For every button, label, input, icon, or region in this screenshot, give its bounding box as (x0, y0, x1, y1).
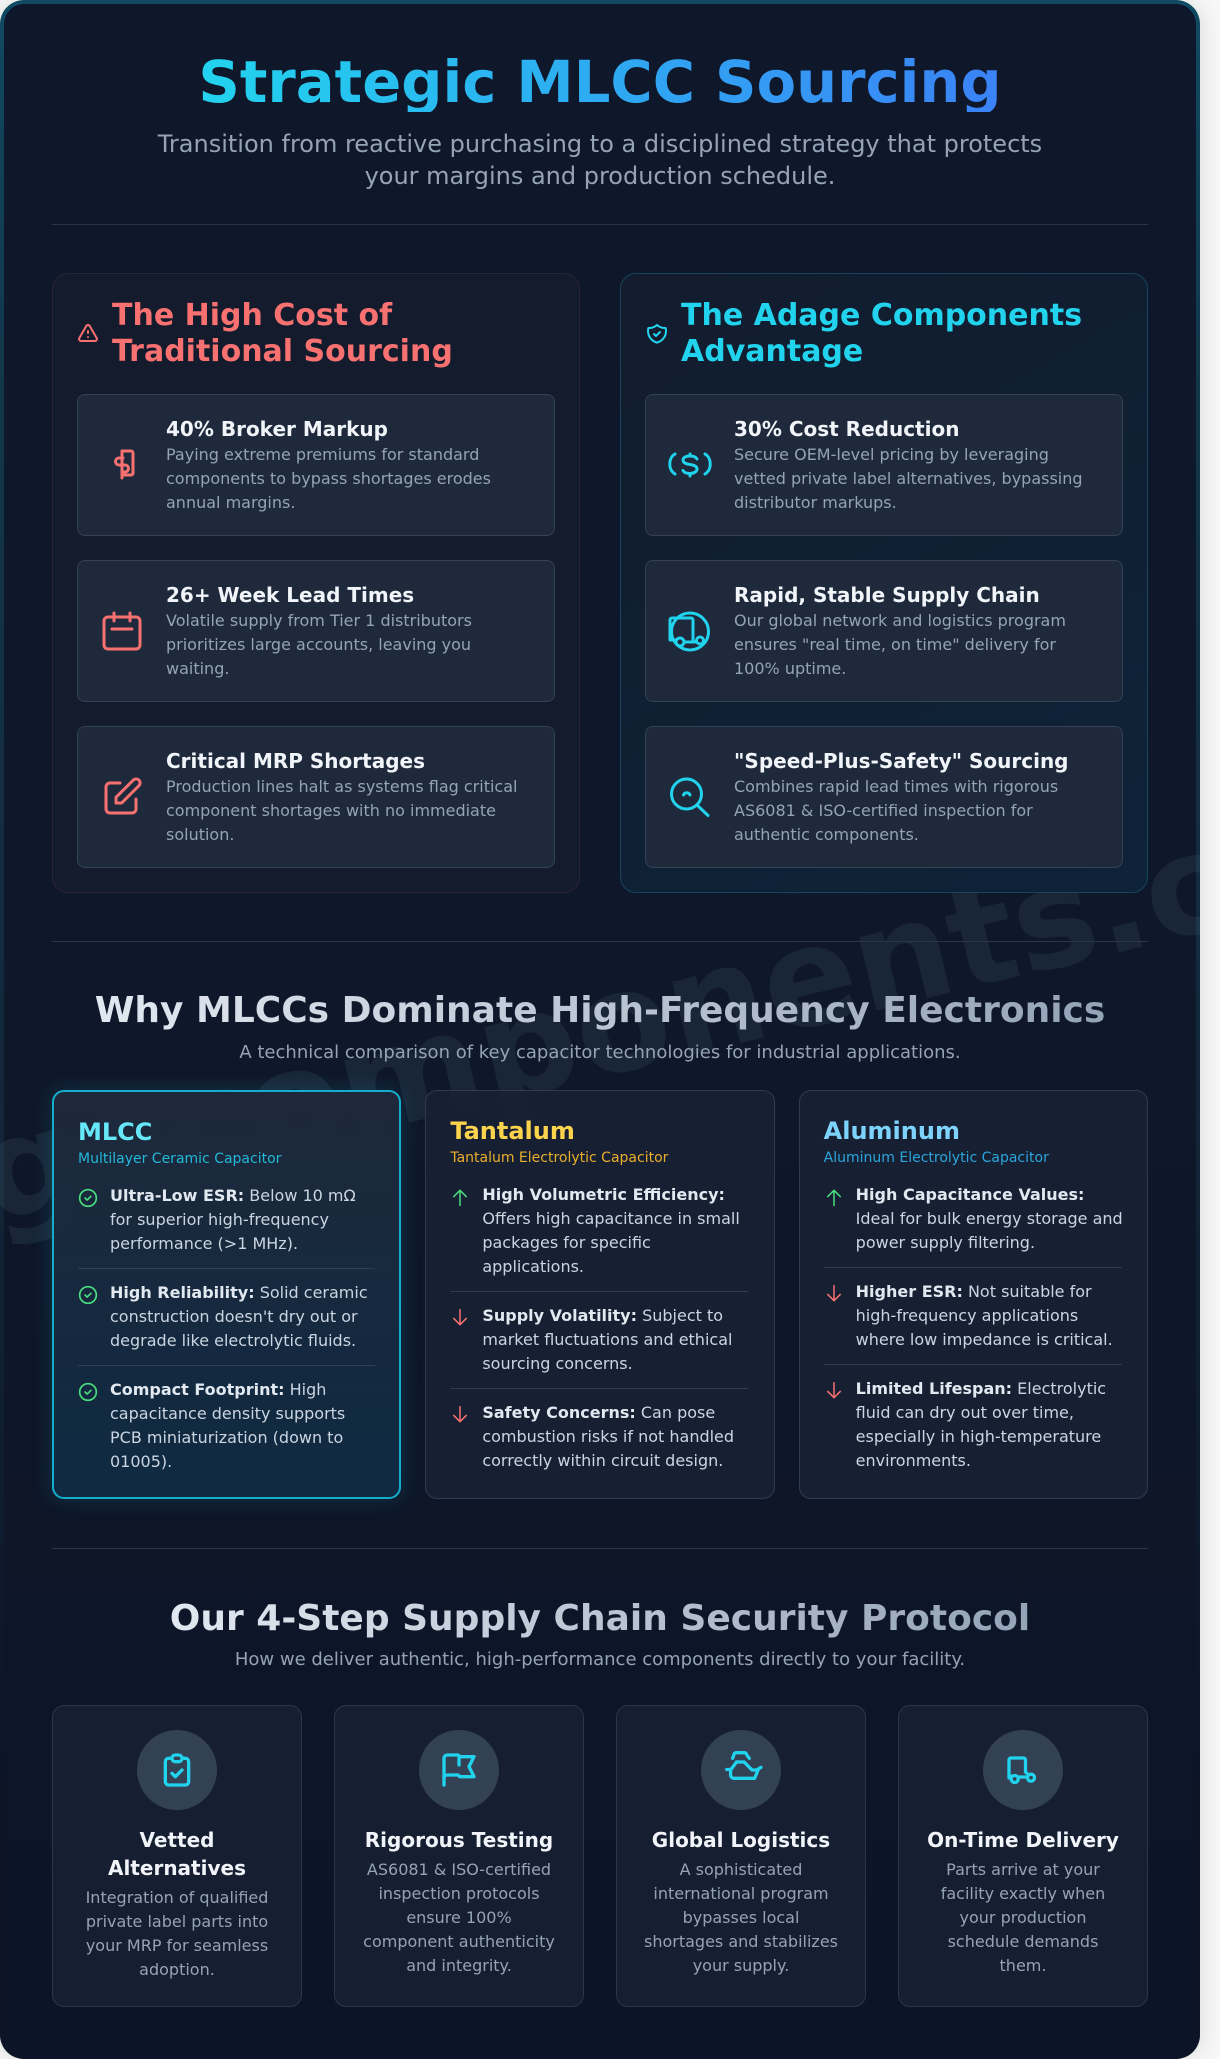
panel: tantalum: Offers high capacitance in small (482, 1209, 740, 1228)
step 2: rigorous testing (334, 1705, 584, 2007)
item: speed plus safety: Combines rapid lead times with rigorous (734, 777, 1058, 796)
item: cost reduction: 30% Cost Reduction (734, 417, 959, 441)
point: safety concerns (453, 1403, 734, 1470)
panel: tantalum: Safety Concerns: Can pose (482, 1403, 715, 1422)
panel: tantalum: High Volumetric Efficiency: (482, 1185, 725, 1204)
panel: MLCC: Compact Footprint: High (110, 1380, 326, 1399)
step 1: vetted alternatives: private label parts into (86, 1912, 268, 1931)
step 1: vetted alternatives: your MRP for seamless (86, 1936, 268, 1955)
item: MRP shortages: Production lines halt as systems flag critical (166, 777, 517, 796)
item: lead times (77, 560, 555, 702)
panel: aluminum: high-frequency applications (856, 1306, 1078, 1325)
item: supply chain (645, 560, 1123, 702)
item: MRP shortages (77, 726, 555, 868)
item: speed plus safety: authentic components. (734, 825, 919, 844)
step 1: vetted alternatives: Vetted (140, 1828, 214, 1852)
step 3: global logistics: international program (653, 1884, 829, 1903)
step 1: vetted alternatives: Integration of qualified (86, 1888, 268, 1907)
panel: adage components advantage (620, 273, 1148, 893)
step 1: vetted alternatives (52, 1705, 302, 2007)
item: broker markup: annual margins. (166, 493, 295, 512)
subtitle (158, 130, 1042, 190)
item: broker markup: components to bypass shortages erodes (166, 469, 491, 488)
heading: traditional sourcing: Traditional Sourcing (112, 334, 453, 369)
item: supply chain: Rapid, Stable Supply Chain (734, 583, 1040, 607)
step 3: global logistics: shortages and stabilizes (644, 1932, 838, 1951)
item: MRP shortages: Critical MRP Shortages (166, 749, 425, 773)
step 4: on-time delivery (898, 1705, 1148, 2007)
icon: ship (701, 1730, 781, 1810)
heading: traditional sourcing: The High Cost of (112, 298, 392, 333)
panel: aluminum: High Capacitance Values: (856, 1185, 1084, 1204)
panel: MLCC: Ultra-Low ESR: Below 10 mΩ (110, 1186, 356, 1205)
point: compact footprint (78, 1380, 345, 1471)
tantalum title: Tantalum (450, 1117, 575, 1145)
title: Strategic MLCC Sourcing (198, 49, 1002, 116)
panel: aluminum: power supply filtering. (856, 1233, 1035, 1252)
item: supply chain: Our global network and logistics program (734, 611, 1066, 630)
MLCC subtitle: Multilayer Ceramic Capacitor (78, 1151, 281, 1167)
step 2: rigorous testing: Rigorous Testing (365, 1828, 553, 1852)
step 4: on-time delivery: your production (960, 1908, 1086, 1927)
heading: adage advantage: The Adage Components (681, 298, 1082, 333)
icon: clipboard check (137, 1730, 217, 1810)
item: cost reduction (645, 394, 1123, 536)
point: limited lifespan (827, 1379, 1106, 1470)
panel: MLCC (52, 1090, 401, 1499)
item: broker markup (77, 394, 555, 536)
step 4: on-time delivery: them. (1000, 1956, 1046, 1975)
item: cost reduction: Secure OEM-level pricing by leveraging (734, 445, 1049, 464)
panel: tantalum: applications. (482, 1257, 584, 1276)
panel: tantalum: sourcing concerns. (482, 1354, 633, 1373)
aluminum subtitle: Aluminum Electrolytic Capacitor (824, 1150, 1049, 1166)
step 3: global logistics (616, 1705, 866, 2007)
item: MRP shortages: component shortages with no immediate (166, 801, 496, 820)
item: speed plus safety: AS6081 & ISO-certified inspection for (734, 801, 1033, 820)
point: high reliability (78, 1283, 368, 1350)
item: cost reduction: vetted private label alternatives, bypassing (734, 469, 1083, 488)
step 2: rigorous testing: AS6081 & ISO-certified (367, 1860, 551, 1879)
item: cost reduction: distributor markups. (734, 493, 897, 512)
item: speed plus safety (645, 726, 1123, 868)
section subtitle: comparison: A technical comparison of key capacitor technologies for industrial applications. (239, 1042, 961, 1063)
panel: tantalum: correctly within circuit design. (482, 1451, 723, 1470)
panel: MLCC: capacitance density supports (110, 1404, 345, 1423)
step 2: rigorous testing: ensure 100% (406, 1908, 512, 1927)
item: MRP shortages: solution. (166, 825, 234, 844)
step 4: on-time delivery: facility exactly when (941, 1884, 1105, 1903)
point: higher ESR (827, 1282, 1113, 1349)
step 1: vetted alternatives: adoption. (139, 1960, 215, 1979)
item: broker markup: Paying extreme premiums for standard (166, 445, 479, 464)
point: high capacitance (827, 1185, 1123, 1252)
heading: adage advantage: Advantage (681, 334, 863, 369)
step 1: vetted alternatives: Alternatives (108, 1856, 246, 1880)
panel: aluminum: where low impedance is critical. (856, 1330, 1113, 1349)
panel: aluminum: Ideal for bulk energy storage and (856, 1209, 1123, 1228)
icon: flag (419, 1730, 499, 1810)
step 3: global logistics: your supply. (693, 1956, 789, 1975)
panel: MLCC: construction doesn't dry out or (110, 1307, 358, 1326)
section subtitle: protocol: How we deliver authentic, high-performance components directly to your facility. (235, 1649, 965, 1670)
item: lead times: 26+ Week Lead Times (166, 583, 414, 607)
panel: tantalum: combustion risks if not handled (482, 1427, 734, 1446)
MLCC title: MLCC (78, 1118, 152, 1146)
point: volumetric efficiency (453, 1185, 740, 1276)
panel: MLCC: degrade like electrolytic fluids. (110, 1331, 356, 1350)
item: supply chain: ensures "real time, on time" delivery for (734, 635, 1056, 654)
step 4: on-time delivery: Parts arrive at your (946, 1860, 1100, 1879)
panel: tantalum (425, 1090, 775, 1499)
item: supply chain: 100% uptime. (734, 659, 846, 678)
panel: MLCC: for superior high-frequency (110, 1210, 329, 1229)
item: lead times: Volatile supply from Tier 1 distributors (166, 611, 472, 630)
panel: aluminum: Limited Lifespan: Electrolytic (856, 1379, 1106, 1398)
item: lead times: prioritizes large accounts, leaving you (166, 635, 471, 654)
panel: tantalum: packages for specific (482, 1233, 651, 1252)
item: broker markup: 40% Broker Markup (166, 417, 388, 441)
step 2: rigorous testing: and integrity. (406, 1956, 512, 1975)
panel: aluminum (799, 1090, 1148, 1499)
panel: high cost of traditional sourcing (52, 273, 580, 893)
panel: tantalum: Supply Volatility: Subject to (482, 1306, 723, 1325)
item: lead times: waiting. (166, 659, 229, 678)
panel: MLCC: PCB miniaturization (down to (110, 1428, 343, 1447)
heading: why MLCCs dominate: Why MLCCs Dominate High-Frequency Electronics (95, 990, 1105, 1031)
point: supply volatility (453, 1306, 732, 1373)
step 2: rigorous testing: component authenticity (363, 1932, 555, 1951)
panel: aluminum: especially in high-temperature (856, 1427, 1101, 1446)
panel: MLCC: performance (>1 MHz). (110, 1234, 298, 1253)
panel: MLCC: 01005). (110, 1452, 172, 1471)
subtitle: your margins and production schedule. (365, 162, 835, 190)
panel: aluminum: environments. (856, 1451, 971, 1470)
panel: aluminum: fluid can dry out over time, (856, 1403, 1074, 1422)
step 2: rigorous testing: inspection protocols (378, 1884, 540, 1903)
panel: MLCC: High Reliability: Solid ceramic (110, 1283, 368, 1302)
heading: adage advantage (647, 298, 1082, 369)
panel: tantalum: market fluctuations and ethical (482, 1330, 732, 1349)
tantalum subtitle: Tantalum Electrolytic Capacitor (450, 1150, 668, 1166)
step 4: on-time delivery: On-Time Delivery (927, 1828, 1119, 1852)
step 3: global logistics: bypasses local (683, 1908, 799, 1927)
aluminum title: Aluminum (824, 1117, 960, 1145)
subtitle: Transition from reactive purchasing to a disciplined strategy that protects (158, 130, 1042, 158)
step 3: global logistics: Global Logistics (652, 1828, 830, 1852)
step 3: global logistics: A sophisticated (680, 1860, 802, 1879)
heading: traditional sourcing (78, 298, 453, 369)
panel: aluminum: Higher ESR: Not suitable for (856, 1282, 1092, 1301)
item: speed plus safety: "Speed-Plus-Safety" Sourcing (734, 749, 1069, 773)
point: ultra-low ESR (78, 1186, 356, 1253)
step 4: on-time delivery: schedule demands (948, 1932, 1098, 1951)
heading: 4-step protocol: Our 4-Step Supply Chain Security Protocol (170, 1598, 1030, 1639)
icon: truck (983, 1730, 1063, 1810)
